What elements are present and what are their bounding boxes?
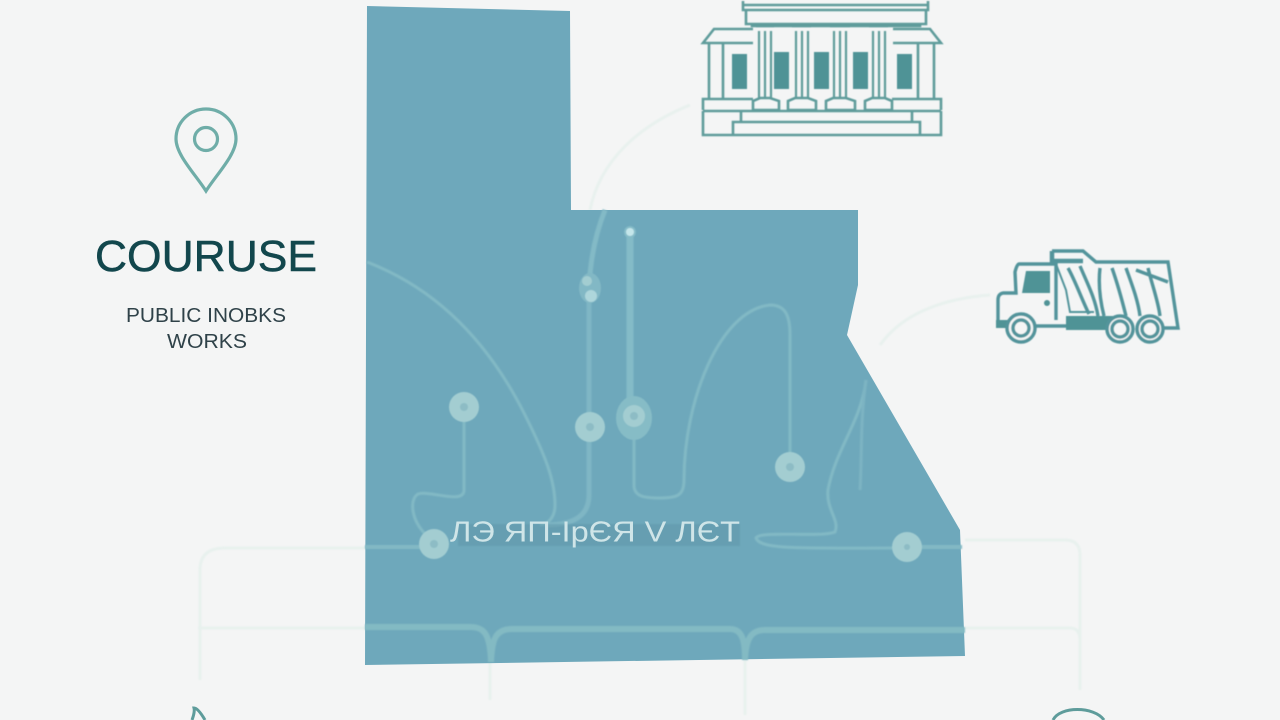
icon: cropped bottom-left marker [192,708,205,720]
subtitle: WORKS [167,331,247,353]
icon: cropped bottom-right marker [1053,710,1104,720]
title: COURUSE [95,232,317,281]
truck cab window [1022,271,1050,293]
icon: dump truck [996,251,1178,342]
faint background network lines [198,105,1080,715]
icon: location pin [176,109,236,191]
icon: courthouse building [703,1,941,135]
map: node markers [419,226,922,562]
map: route network [365,210,965,662]
map: region shape [365,6,965,665]
windows [732,54,747,89]
subtitle [126,305,286,353]
truck wheels [1007,314,1163,342]
map: garbled route label: ЛЭ ЯП-ІрЄЯ V ЛЄТ [450,516,740,548]
subtitle: PUBLIC INOBKS [126,305,286,327]
